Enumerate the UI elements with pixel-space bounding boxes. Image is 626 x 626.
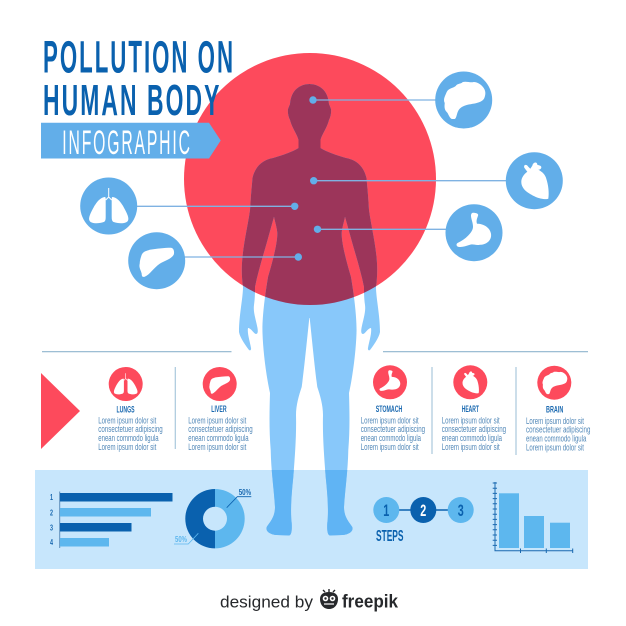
donut chart: 50% — [175, 535, 187, 544]
steps diagram: 1 — [383, 501, 389, 520]
panel: heart: consectetuer adipiscing — [442, 424, 506, 435]
human body silhouette — [239, 84, 380, 536]
steps diagram: 3 — [458, 501, 464, 520]
subtitle ribbon — [41, 123, 221, 162]
panel: heart — [442, 365, 506, 453]
connector: lungs — [135, 203, 298, 210]
footer credit: freepik — [342, 592, 399, 612]
panel: lungs: enean commodo ligula — [98, 433, 159, 444]
bar chart: 2 — [50, 508, 53, 518]
title: HUMAN BODY — [43, 76, 222, 125]
bar chart: 4 — [50, 538, 53, 547]
red circle behind body — [184, 53, 436, 305]
text: POLLUTION ON — [43, 32, 235, 83]
icon: liver — [128, 232, 185, 289]
steps diagram: 2 — [420, 501, 426, 520]
panel: brain: BRAIN — [546, 404, 563, 415]
bar chart — [50, 492, 172, 548]
connector: brain — [309, 96, 438, 104]
pale blue chart band — [35, 470, 588, 569]
connector: heart — [310, 177, 508, 184]
donut chart: 50% — [239, 488, 251, 497]
icon: lungs — [80, 178, 137, 234]
footer credit: designed by — [220, 594, 314, 612]
panel: brain: Lorem ipsum dolor sit — [526, 443, 584, 454]
panel: brain: consectetuer adipiscing — [526, 425, 590, 436]
bar chart: 1 — [50, 493, 53, 502]
icon: stomach — [446, 204, 502, 261]
icon: heart — [506, 152, 563, 209]
connector: stomach — [314, 226, 448, 233]
panel: liver: LIVER — [211, 403, 227, 414]
panel: lungs: LUNGS — [116, 404, 134, 414]
subtitle ribbon: INFOGRAPHIC — [62, 124, 192, 162]
panel: heart: Lorem ipsum dolor sit — [442, 442, 500, 453]
panel: brain: enean commodo ligula — [526, 434, 587, 445]
panel: stomach: consectetuer adipiscing — [361, 424, 425, 435]
panel: stomach: STOMACH — [376, 403, 403, 414]
panel: stomach — [361, 365, 425, 453]
panel: liver: enean commodo ligula — [188, 433, 249, 444]
footer credit — [220, 589, 399, 612]
panel: stomach: Lorem ipsum dolor sit — [361, 415, 419, 426]
panel: stomach: Lorem ipsum dolor sit — [361, 442, 419, 453]
panel: brain — [526, 366, 590, 454]
panel: brain: Lorem ipsum dolor sit — [526, 416, 584, 427]
title — [43, 32, 235, 125]
panel: lungs: Lorem ipsum dolor sit — [98, 415, 157, 426]
donut chart — [174, 488, 251, 548]
icon: freepik mascot — [320, 589, 338, 609]
panel: heart: Lorem ipsum dolor sit — [442, 415, 500, 426]
panel: heart: HEART — [462, 403, 479, 414]
connector: liver — [183, 253, 302, 261]
panel: liver: consectetuer adipiscing — [188, 424, 253, 435]
panel: liver: Lorem ipsum dolor sit — [188, 442, 247, 453]
panel: liver — [188, 367, 253, 453]
panel: stomach: enean commodo ligula — [361, 433, 421, 444]
panel: lungs — [98, 367, 163, 453]
bar chart: 3 — [50, 524, 53, 532]
steps diagram: STEPS — [376, 528, 404, 545]
icon: brain — [435, 72, 492, 128]
column chart — [493, 482, 573, 553]
steps diagram — [373, 497, 474, 545]
red triangle arrow — [41, 373, 80, 449]
panel: liver: Lorem ipsum dolor sit — [188, 415, 247, 426]
panel: heart: enean commodo ligula — [442, 433, 502, 444]
panel: lungs: consectetuer adipiscing — [98, 424, 163, 435]
panel: lungs: Lorem ipsum dolor sit — [98, 442, 157, 453]
